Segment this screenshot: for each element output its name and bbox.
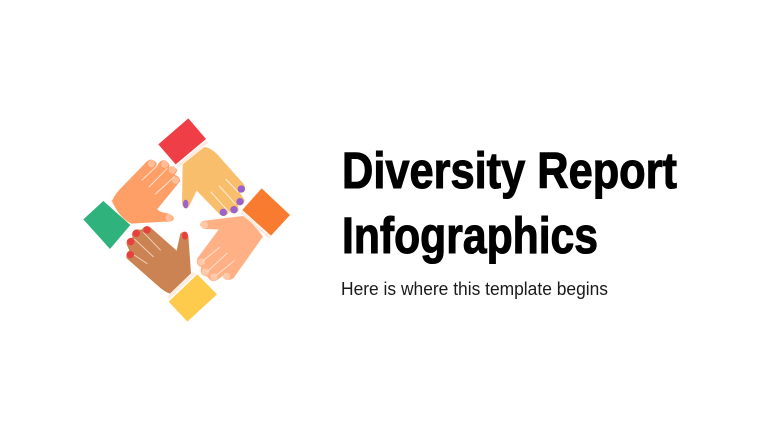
title: Diversity Report	[342, 142, 677, 199]
title: Infographics	[342, 207, 598, 264]
hand: top left peach	[112, 160, 180, 224]
yellow sleeve	[169, 274, 217, 322]
sleeve cuffs	[111, 142, 270, 298]
red sleeve	[158, 118, 206, 164]
orange sleeve	[242, 188, 290, 236]
green sleeve	[83, 201, 130, 249]
title	[342, 142, 677, 264]
hand: bottom left brown	[126, 226, 191, 294]
hand: lower right light peach	[197, 216, 263, 281]
hand: top right golden	[182, 147, 245, 216]
subtitle: Here is where this template begins	[341, 279, 608, 299]
logo: joined hands diamond	[83, 118, 290, 322]
